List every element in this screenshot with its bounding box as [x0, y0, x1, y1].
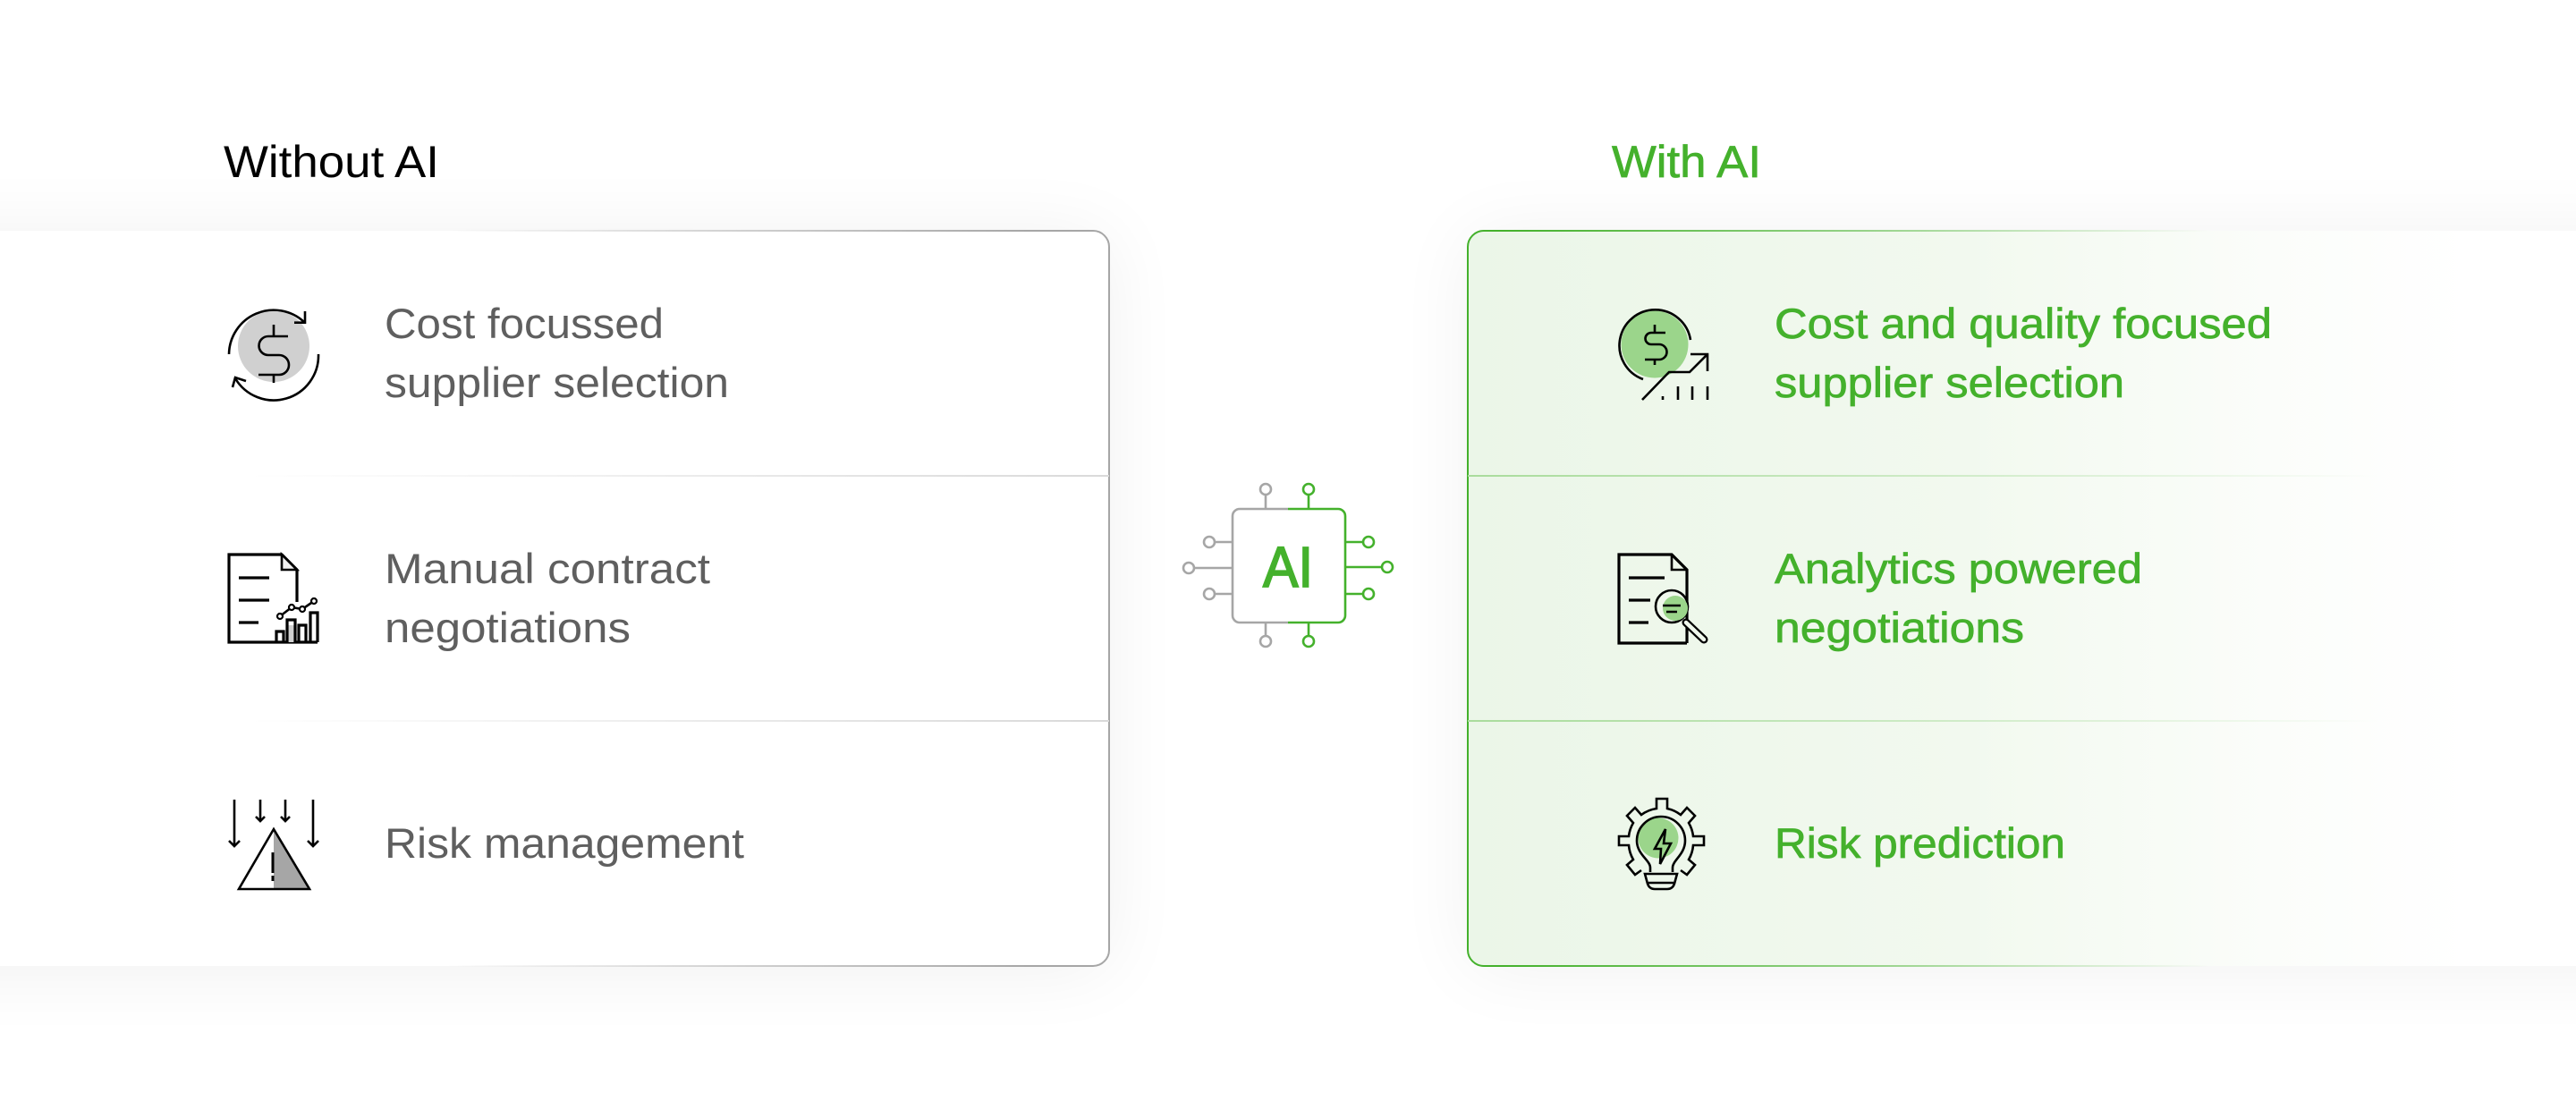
text: cost focussed supplier selection: Cost focussed [385, 300, 664, 347]
panel: without AI [0, 231, 1109, 970]
chip label: AI [1263, 535, 1313, 599]
text: analytics powered negotiations: negotiations [1775, 604, 2024, 651]
text: cost and quality focused supplier selection: Cost and quality focused [1775, 300, 2272, 347]
icon: dollar with rising arrow [1620, 309, 1707, 400]
icon: AI chip [1183, 484, 1393, 647]
text: cost focussed supplier selection: supplier selection [385, 359, 729, 406]
chip left half in grey [1183, 484, 1288, 647]
text: cost and quality focused supplier selection: supplier selection [1775, 359, 2124, 406]
icon: gear with light bulb [1619, 799, 1704, 889]
text: manual contract negotiations [385, 545, 710, 651]
text: risk management: Risk management [385, 819, 744, 867]
icon: document with chart [229, 555, 318, 642]
text: cost and quality focused supplier selection [1775, 300, 2272, 406]
text: analytics powered negotiations: Analytics powered [1775, 545, 2142, 592]
text: risk prediction: Risk prediction [1775, 819, 2065, 867]
chip right half in green [1288, 484, 1393, 647]
text: manual contract negotiations: negotiations [385, 604, 631, 651]
text: cost focussed supplier selection [385, 300, 729, 406]
icon: document with magnifier [1619, 555, 1704, 643]
text: manual contract negotiations: Manual contract [385, 545, 710, 592]
icon: warning triangle with falling arrows [229, 800, 318, 889]
icon: dollar with cycle arrows [229, 310, 318, 401]
heading: Without AI: Without AI [224, 137, 439, 187]
text: analytics powered negotiations [1775, 545, 2142, 651]
panel: with AI [1468, 231, 2576, 970]
heading: With AI: With AI [1612, 137, 1761, 187]
